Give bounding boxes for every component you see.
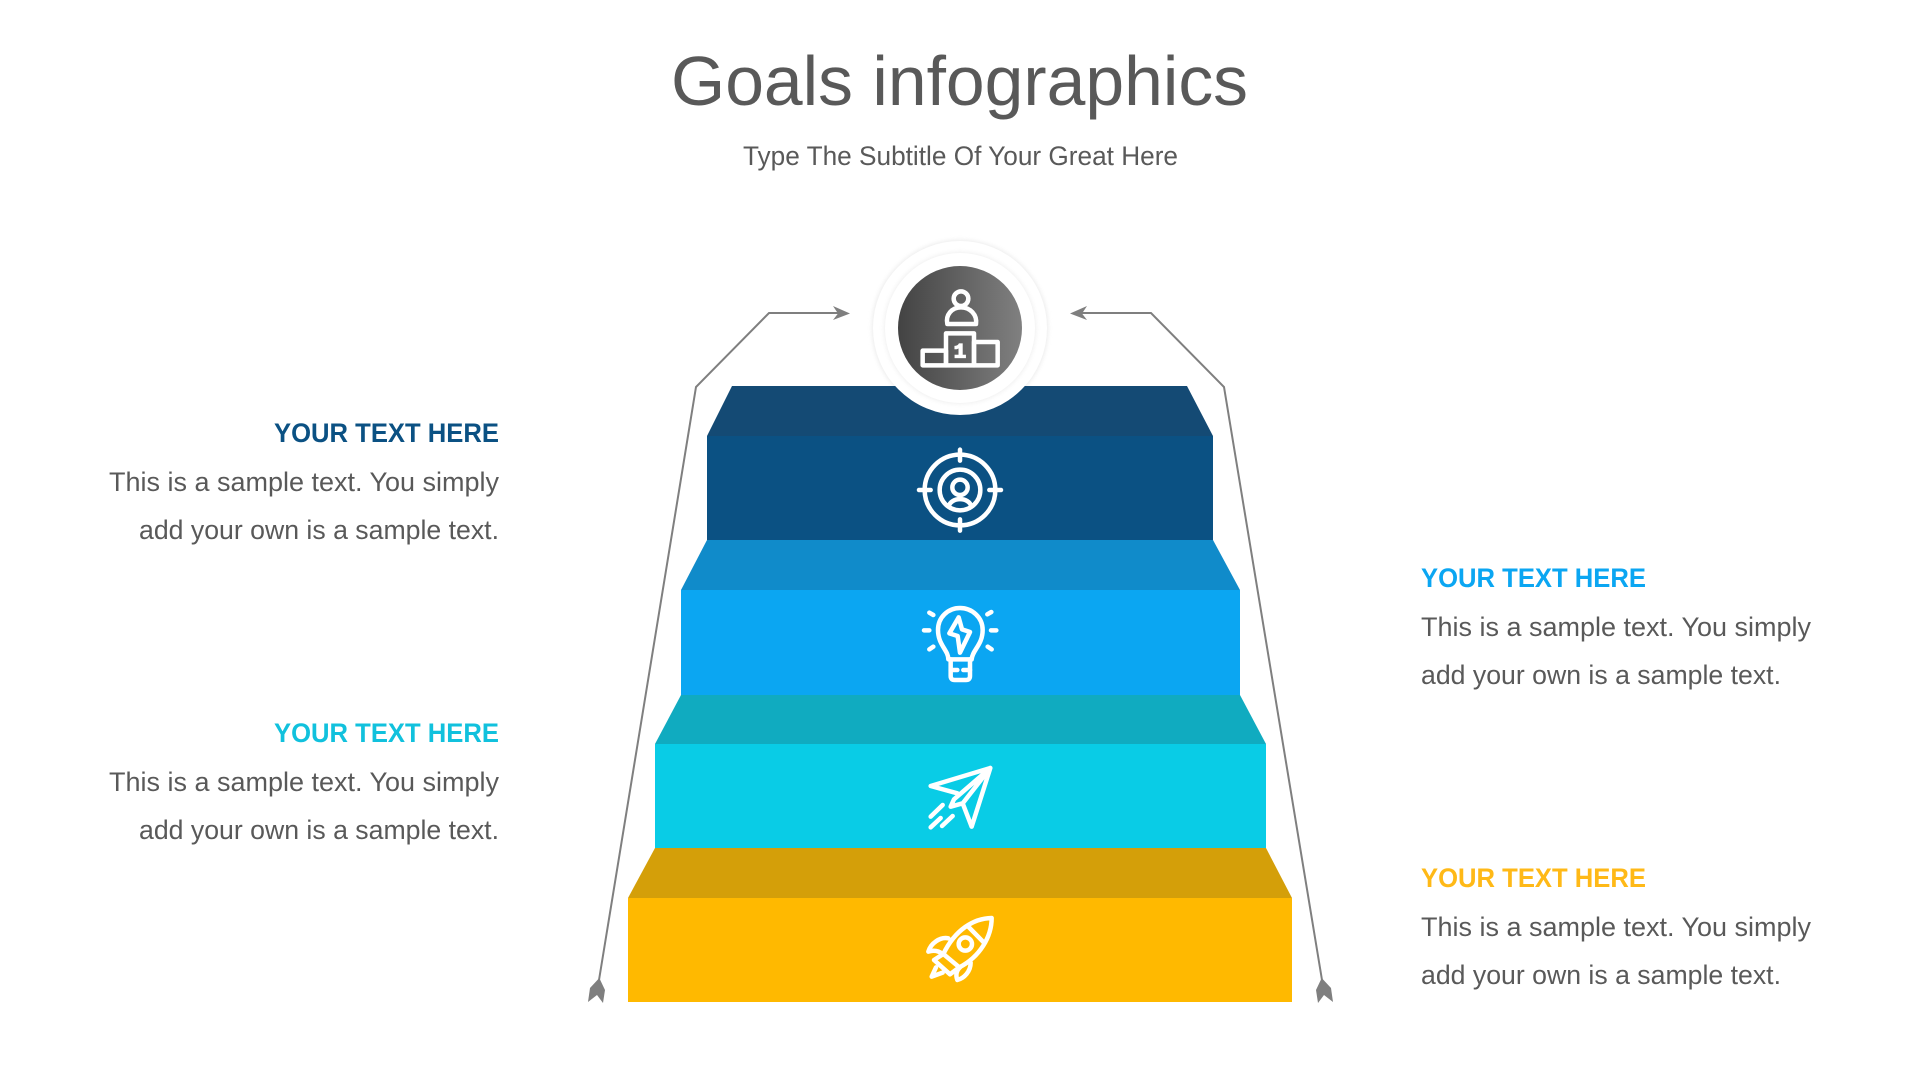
text block: cyan [109, 718, 499, 845]
infographic canvas [110, 54, 1811, 1003]
icon: podium: 1 [954, 341, 966, 364]
heading: YOUR TEXT HERE [1421, 863, 1646, 893]
icon: podium [923, 291, 998, 365]
body line 2: add your own is a sample text. [139, 515, 499, 545]
left arrow [588, 306, 850, 1003]
subtitle: Type The Subtitle Of Your Great Here [743, 141, 1178, 171]
right arrow [1070, 306, 1333, 1003]
body line 1: This is a sample text. You simply [109, 767, 499, 797]
body line 1: This is a sample text. You simply [1421, 912, 1811, 942]
step 1: yellow [628, 848, 1292, 1002]
icon: target person [919, 450, 1001, 531]
heading: YOUR TEXT HERE [274, 418, 499, 448]
body line 2: add your own is a sample text. [139, 815, 499, 845]
body line 2: add your own is a sample text. [1421, 960, 1781, 990]
text block: navy [109, 418, 499, 545]
heading: YOUR TEXT HERE [274, 718, 499, 748]
top medallion with podium icon [872, 240, 1048, 416]
body line 1: This is a sample text. You simply [109, 467, 499, 497]
text block: yellow [1421, 863, 1811, 990]
icon: paper plane [931, 768, 990, 827]
staircase [628, 386, 1292, 1002]
heading: YOUR TEXT HERE [1421, 563, 1646, 593]
step 2: cyan [655, 695, 1266, 848]
body line 1: This is a sample text. You simply [1421, 612, 1811, 642]
icon: rocket [928, 918, 992, 980]
title: Goals infographics [671, 42, 1248, 120]
step 4: navy [707, 386, 1213, 540]
body line 2: add your own is a sample text. [1421, 660, 1781, 690]
text block: blue [1421, 563, 1811, 690]
icon: light bulb [924, 608, 996, 680]
step 3: blue [681, 540, 1240, 695]
